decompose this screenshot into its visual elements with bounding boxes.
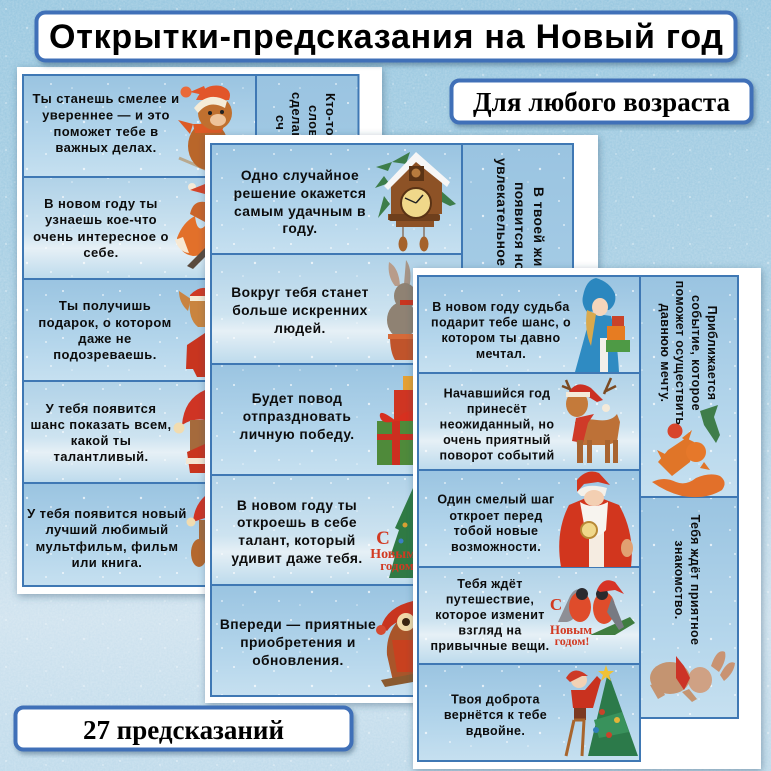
- text: card 1: поможет тебе в: [53, 124, 159, 139]
- icon: bear on a sled: [178, 86, 232, 174]
- text: side card: [273, 92, 338, 144]
- text: card 1: В новом году судьба: [432, 300, 570, 314]
- icon: snow maiden: [575, 278, 630, 372]
- text: card 4: путешествие,: [446, 592, 534, 606]
- text: card 1: важных делах.: [55, 140, 157, 155]
- icon: fawn: [179, 288, 205, 377]
- text: card 4: удивит даже тебя.: [231, 551, 363, 566]
- text: card 5: мультфильм, фильм: [36, 539, 178, 554]
- text: card 4: откроешь в себе: [237, 515, 357, 530]
- text: card 2: узнаешь кое-что: [45, 212, 157, 227]
- text: card 5: вдвойне.: [466, 724, 525, 738]
- icon: bullfinches and greeting: годом!: [555, 634, 589, 648]
- text: card 2: принесёт: [467, 402, 527, 416]
- text: card 4: которое изменит: [435, 608, 545, 622]
- icon: greeting with tree: С: [376, 528, 390, 549]
- icon: greeting with tree: [370, 488, 416, 578]
- text: side card 1: давнюю мечту.: [658, 304, 672, 402]
- text: card 5: вернётся к тебе: [444, 708, 547, 722]
- text: card 3: даже не: [78, 331, 132, 346]
- text: side card 1: поможет осуществить: [673, 281, 687, 425]
- text: card 3: Ты получишь: [59, 298, 151, 313]
- text: side card 1: [658, 281, 719, 425]
- text: side card: [494, 158, 546, 271]
- text: card 3: подозреваешь.: [53, 347, 157, 362]
- text: card 1: году.: [282, 221, 318, 236]
- text: card 5: обновления.: [252, 653, 344, 668]
- text: card 4: В новом году ты: [237, 498, 357, 513]
- label: 27 predictions: [16, 708, 352, 750]
- icon: Santa: [559, 472, 633, 567]
- text: card 3: подарок, о котором: [38, 315, 172, 330]
- panel: sheet 1: [17, 67, 382, 594]
- text: card 3: личную победу.: [240, 427, 354, 442]
- text: card 4: привычные вещи.: [430, 639, 550, 653]
- icon: gift boxes: [377, 376, 413, 465]
- title banner: Открытки-предсказания на Новый год: [49, 18, 723, 56]
- text: card 2: Начавшийся год: [444, 386, 550, 400]
- panel: sheet 3: [413, 268, 761, 769]
- text: side card: появится но: [512, 182, 527, 271]
- text: card 4: взгляд на: [458, 624, 522, 638]
- text: card 3: Один смелый шаг: [437, 492, 555, 506]
- text: card 5: лучший любимый: [45, 522, 169, 537]
- text: card 3: Будет повод: [252, 391, 342, 406]
- icon: reindeer: [562, 378, 620, 463]
- text: card 1: Одно случайное: [241, 168, 359, 183]
- icon: bullfinches and greeting: [550, 580, 635, 648]
- panel: sheet 2: [205, 135, 598, 703]
- text: side card: слов: [306, 105, 321, 138]
- text: card 2: очень приятный: [443, 433, 551, 447]
- text: card 4: Тебя ждёт: [457, 577, 523, 591]
- text: card 3: отпраздновать: [243, 409, 351, 424]
- text: side card 2: знакомство.: [672, 540, 686, 620]
- text: side card 1: Приближается: [705, 306, 719, 400]
- text: card 4: талантливый.: [53, 449, 149, 464]
- text: card 1: мечтал.: [476, 347, 526, 361]
- text: card 3: возможности.: [451, 540, 541, 554]
- text: card 2: неожиданный, но: [440, 418, 554, 432]
- text: card 1: самым удачным в: [234, 204, 366, 219]
- text: card 5: приобретения и: [240, 635, 356, 650]
- text: side card: В твоей жи: [531, 187, 546, 267]
- icon: bullfinches and greeting: С: [550, 595, 562, 614]
- icon: bunny: [650, 651, 735, 702]
- icon: squirrel with ornament: [652, 405, 725, 497]
- icon: owl: [376, 601, 415, 687]
- text: card 5: У тебя появится новый: [27, 506, 187, 521]
- text: card 2: В новом году ты: [44, 196, 158, 211]
- text: card 2: людей.: [274, 321, 326, 336]
- text: card 2: поворот событий: [439, 448, 555, 462]
- text: card 4: талант, который: [238, 533, 356, 548]
- icon: greeting with tree: Новым: [370, 547, 416, 562]
- icon: rabbit on a pot: [387, 260, 417, 360]
- text: card 2: Вокруг тебя станет: [231, 285, 369, 300]
- label: 27 predictions: 27 предсказаний: [83, 715, 284, 745]
- text: side card: сделаю: [289, 92, 304, 144]
- text: card 4: какой ты: [71, 433, 131, 448]
- icon: fox: [175, 183, 205, 269]
- text: card 1: Ты станешь смелее и: [32, 91, 180, 106]
- icon: greeting with tree: годом: [380, 558, 414, 573]
- text: side card 2: Тебя ждёт приятное: [688, 515, 702, 645]
- label: any age: Для любого возраста: [473, 87, 730, 117]
- text: card 2: очень интересное о: [33, 229, 169, 244]
- icon: bullfinches and greeting: Новым: [550, 622, 592, 637]
- text: side card: сч: [273, 115, 288, 130]
- text: card 4: шанс показать всем,: [30, 417, 172, 432]
- text: card 5: Впереди — приятные: [220, 617, 376, 632]
- label: any age: [452, 80, 752, 122]
- text: side card: Кто-то: [323, 93, 338, 136]
- text: card 2: себе.: [83, 245, 119, 260]
- icon: mouse in hat: [174, 390, 205, 473]
- text: side card 1: событие, которое: [689, 295, 703, 411]
- text: card 5: или книга.: [72, 555, 142, 570]
- icon: character in red hat: [186, 496, 207, 567]
- icon: cuckoo clock: [375, 152, 456, 252]
- icon: boy decorating a tree: [566, 665, 638, 756]
- text: side card: увлекательное: [494, 158, 509, 266]
- text: card 1: котором ты давно: [442, 331, 560, 345]
- text: card 3: откроет перед: [449, 509, 543, 523]
- text: card 1: увереннее — и это: [42, 108, 170, 122]
- text: card 1: подарит тебе шанс, о: [431, 316, 571, 330]
- text: card 2: больше искренних: [232, 303, 368, 318]
- text: card 4: У тебя появится: [46, 401, 156, 416]
- text: side card 2: [672, 515, 702, 645]
- text: card 3: тобой новые: [454, 524, 538, 538]
- text: card 5: Твоя доброта: [451, 692, 541, 706]
- text: card 1: решение окажется: [234, 186, 366, 201]
